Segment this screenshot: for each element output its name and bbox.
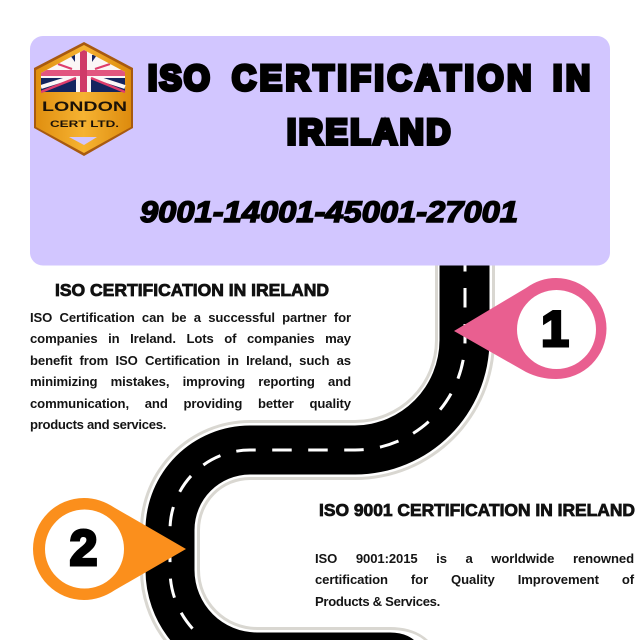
text block: section 1 body: companies in Ireland. Lots of companies may <box>30 331 351 346</box>
text block: section 1 body: benefit from ISO Certification in Ireland, such as <box>30 352 351 368</box>
text block: section 2 body: Products & Services. <box>315 594 440 608</box>
pin 2 <box>33 498 186 600</box>
text block: section 2 body: certification for Quality Improvement of <box>315 572 634 587</box>
flag <box>41 50 125 92</box>
text block: section 1 body <box>30 310 351 432</box>
logo: London Cert Ltd badge: CERT LTD. <box>50 119 119 130</box>
standards numbers: 9001-14001-45001-27001 <box>140 196 518 229</box>
logo text: LONDON <box>42 99 127 114</box>
text block: section 1 body: products and services. <box>30 417 166 432</box>
panel: title header <box>30 36 610 266</box>
text block: section 2 body <box>315 550 634 608</box>
heading: section 1: ISO CERTIFICATION IN IRELAND <box>55 280 329 300</box>
text block: section 1 body: communication, and providing better quality <box>30 396 351 410</box>
logo: London Cert Ltd badge <box>34 42 133 156</box>
title line 1: IN <box>553 59 590 98</box>
title line 2: IRELAND <box>287 113 450 152</box>
title line 1: CERTIFICATION <box>232 59 531 98</box>
road <box>140 255 495 640</box>
pin 1 <box>454 278 606 379</box>
text block: section 1 body: ISO Certification can be a successful partner for <box>30 310 351 324</box>
pin 1: 1 <box>541 301 569 357</box>
pin 2: 2 <box>70 520 97 576</box>
text block: section 1 body: minimizing mistakes, improving reporting and <box>30 374 351 389</box>
title line 1: ISO <box>148 59 210 98</box>
heading: section 2: ISO 9001 CERTIFICATION IN IRELAND <box>319 500 635 520</box>
text block: section 2 body: ISO 9001:2015 is a worldwide renowned <box>315 550 634 566</box>
title line 1 <box>148 59 590 98</box>
